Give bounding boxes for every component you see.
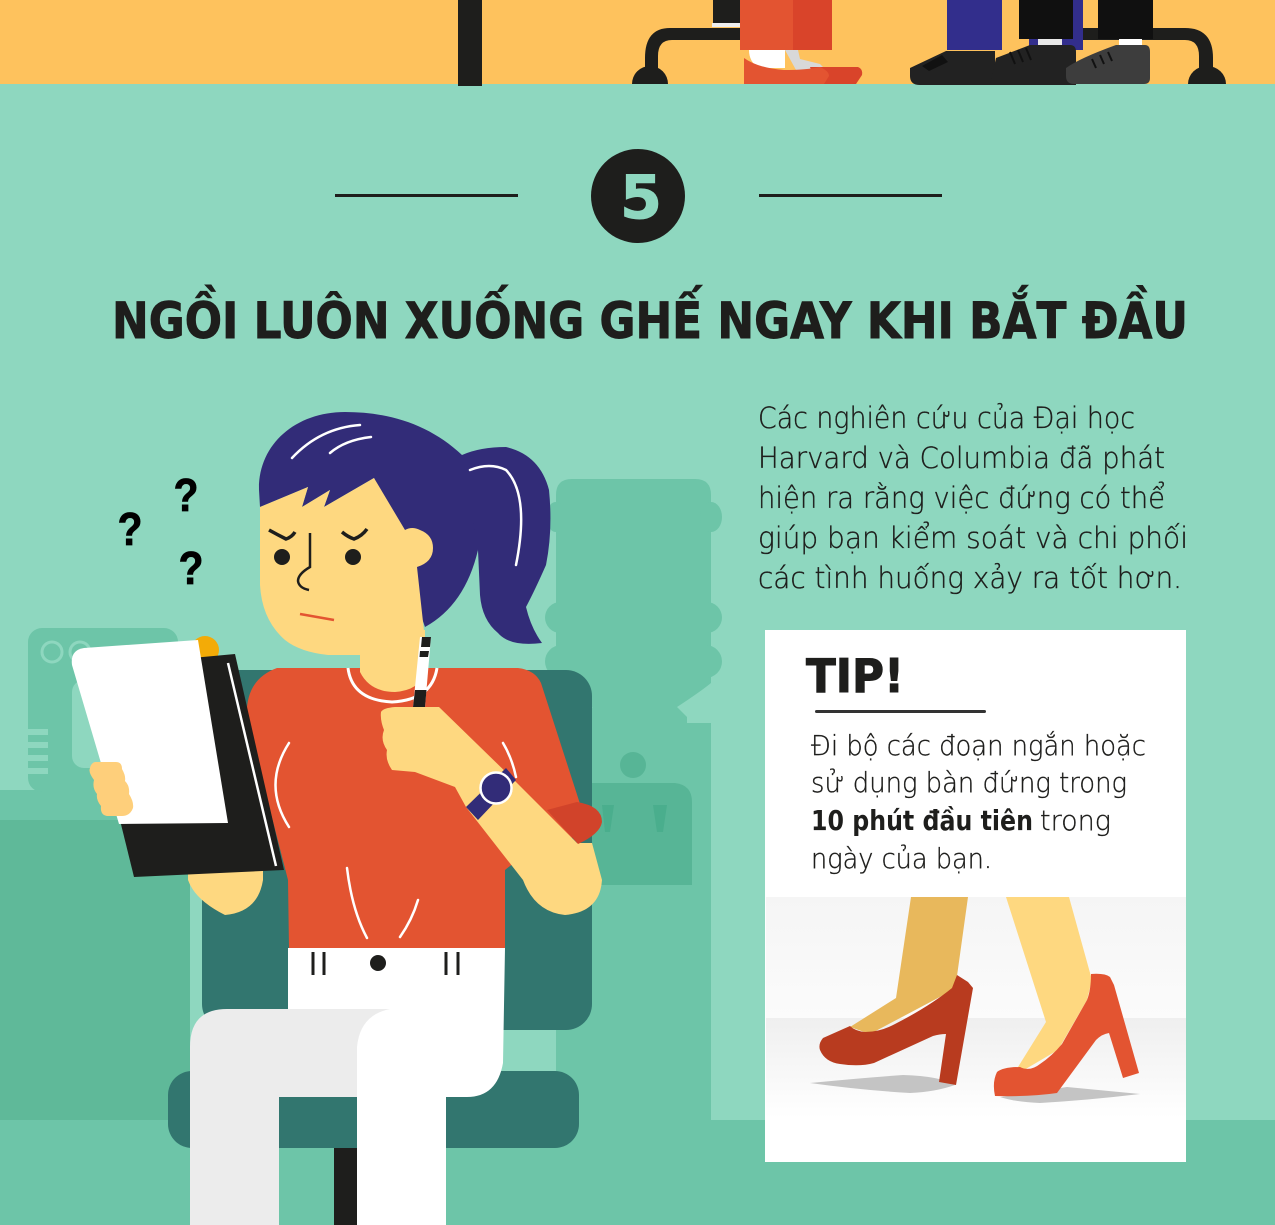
background office scene [0,479,1275,1225]
left cabinet [0,790,190,1120]
section number badge: 5 [620,163,662,233]
left appliance [28,628,178,792]
hair highlights [292,425,521,565]
body paragraph [758,401,1188,595]
tip text: 10 phút đầu tiên [811,804,1033,837]
left hand fingers [90,762,133,816]
blue and black trousers and shoes [910,0,1153,85]
tip text: sử dụng bàn đứng trong [811,767,1127,799]
ponytail [440,447,550,644]
shirt torso [247,668,582,949]
body paragraph: Các nghiên cứu của Đại học [758,401,1135,435]
left forearm [188,860,263,915]
chair pole [334,1148,357,1225]
wristwatch [466,768,516,820]
question marks: ? [118,503,142,555]
right forearm and fist [381,707,602,915]
paper [72,640,228,824]
tip text: Đi bộ các đoạn ngắn hoặc [811,729,1146,762]
tip card [765,630,1186,1162]
chair [168,670,592,1225]
section number badge [335,149,942,243]
body paragraph: giúp bạn kiểm soát và chi phối [758,520,1188,555]
body paragraph: các tình huống xảy ra tốt hơn. [758,561,1182,595]
illustration: walking feet in red heels [766,897,1186,1118]
body paragraph: hiện ra rằng việc đứng có thể [758,480,1165,515]
question marks [118,469,204,594]
floor [0,1120,1275,1225]
chair back [202,670,592,1030]
tip heading: TIP! [806,649,904,703]
hair [259,412,478,627]
question marks: ? [174,469,198,521]
tip text [811,729,1146,875]
face [260,478,433,655]
chair pole [458,0,482,86]
top band: previous section with chair and feet [0,0,1275,86]
character: confused woman holding a notepad [72,412,602,1225]
facial features [269,529,367,620]
neck skin over shirt [360,655,425,692]
chair seat [168,1071,579,1148]
sleeve cuff [547,802,602,844]
shirt fold lines [276,743,516,938]
pen [413,637,431,707]
red trousers and shoes [740,0,862,84]
water cooler [545,479,722,1120]
trousers [190,948,505,1225]
chair base [645,28,740,72]
question marks: ? [178,542,204,594]
tip text: trong [1040,805,1111,837]
tip text: ngày của bạn. [811,843,992,875]
body paragraph: Harvard và Columbia đã phát [758,441,1165,475]
belt details [313,952,458,975]
neck [360,630,425,692]
collar [348,668,437,702]
clipboard [72,636,284,877]
